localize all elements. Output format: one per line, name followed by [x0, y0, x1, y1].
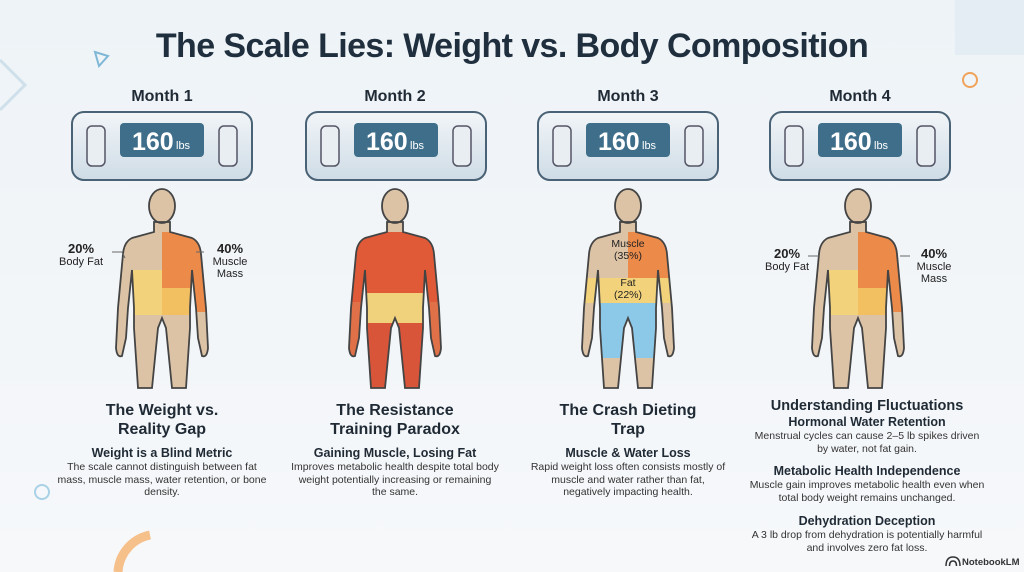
panel text 4: Menstrual cycles can cause 2–5 lb spikes driven by water, not fat gain. [755, 430, 979, 454]
scales and figures [71, 111, 961, 566]
panel text 1: The scale cannot distinguish between fat mass, muscle mass, water retention, or bone density. [58, 461, 266, 498]
scale 1: 160 [132, 128, 174, 156]
month labels: Month 2 [364, 88, 426, 105]
brand: NotebookLM [962, 557, 1020, 568]
panel text 4: Dehydration Deception [799, 514, 935, 528]
panel text 2 [291, 402, 499, 498]
panel text 3 [531, 402, 726, 498]
leader lines [112, 252, 204, 258]
figure 3: Fat [620, 277, 636, 289]
scale 3 [538, 112, 718, 180]
figure labels: 40% [217, 241, 243, 256]
month labels: Month 3 [597, 88, 659, 105]
panel text 3: The Crash Dieting [560, 402, 696, 419]
scale 2 [306, 112, 486, 180]
text: Body Fat [765, 261, 809, 273]
text: 20% [774, 246, 800, 261]
month labels: Month 1 [131, 88, 193, 105]
scale 4: lbs [874, 140, 889, 152]
figure 3: (35%) [614, 250, 642, 262]
text: Muscle [917, 261, 951, 273]
figure 3 [578, 189, 678, 388]
panel text 1: The Weight vs. [106, 402, 218, 419]
figure labels: Body Fat [59, 256, 103, 268]
panel text 3: Rapid weight loss often consists mostly of muscle and water rather than fat, negatively impacting health. [531, 461, 725, 498]
panel text 4: Hormonal Water Retention [788, 415, 946, 429]
scale 3: 160 [598, 128, 640, 156]
panel text 4: Understanding Fluctuations [771, 398, 963, 414]
panel text 1: Weight is a Blind Metric [92, 446, 232, 460]
figure labels [59, 241, 247, 280]
figure labels: 20% [68, 241, 94, 256]
text: 40% [921, 246, 947, 261]
figure 1 [116, 189, 212, 388]
month labels [131, 88, 891, 105]
NotebookLM logo [946, 557, 960, 566]
panel text 1: Reality Gap [118, 421, 206, 438]
panel text 3: Muscle & Water Loss [565, 446, 691, 460]
scale 2: 160 [366, 128, 408, 156]
scale 4 [770, 112, 950, 180]
panel text 2: The Resistance [336, 402, 454, 419]
figure labels: Mass [217, 268, 243, 280]
figure 3: (22%) [614, 289, 642, 301]
title: The Scale Lies: Weight vs. Body Composition [156, 27, 868, 65]
figure labels: Muscle [213, 256, 247, 268]
panel text 4: A 3 lb drop from dehydration is potentially harmful and involves zero fat loss. [752, 529, 982, 554]
panel text 2: Improves metabolic health despite total body weight potentially increasing or remaining the same. [291, 461, 499, 498]
scale 1 [72, 112, 252, 180]
panel text 4: Muscle gain improves metabolic health even when total body weight remains unchanged. [750, 479, 984, 504]
panel text 3: Trap [611, 421, 645, 438]
panel text 1 [58, 402, 266, 498]
figure 2 [345, 189, 445, 388]
scale 1: lbs [176, 140, 191, 152]
figure 4 [812, 189, 908, 388]
panel text 4 [750, 398, 984, 554]
text: Mass [921, 273, 947, 285]
panel text 2: Gaining Muscle, Losing Fat [314, 446, 476, 460]
figure 3: Muscle [611, 238, 645, 250]
scale 3: lbs [642, 140, 657, 152]
scale 2: lbs [410, 140, 425, 152]
month labels: Month 4 [829, 88, 891, 105]
panel text 4: Metabolic Health Independence [774, 464, 960, 478]
panel text 2: Training Paradox [330, 421, 460, 438]
scale 4: 160 [830, 128, 872, 156]
